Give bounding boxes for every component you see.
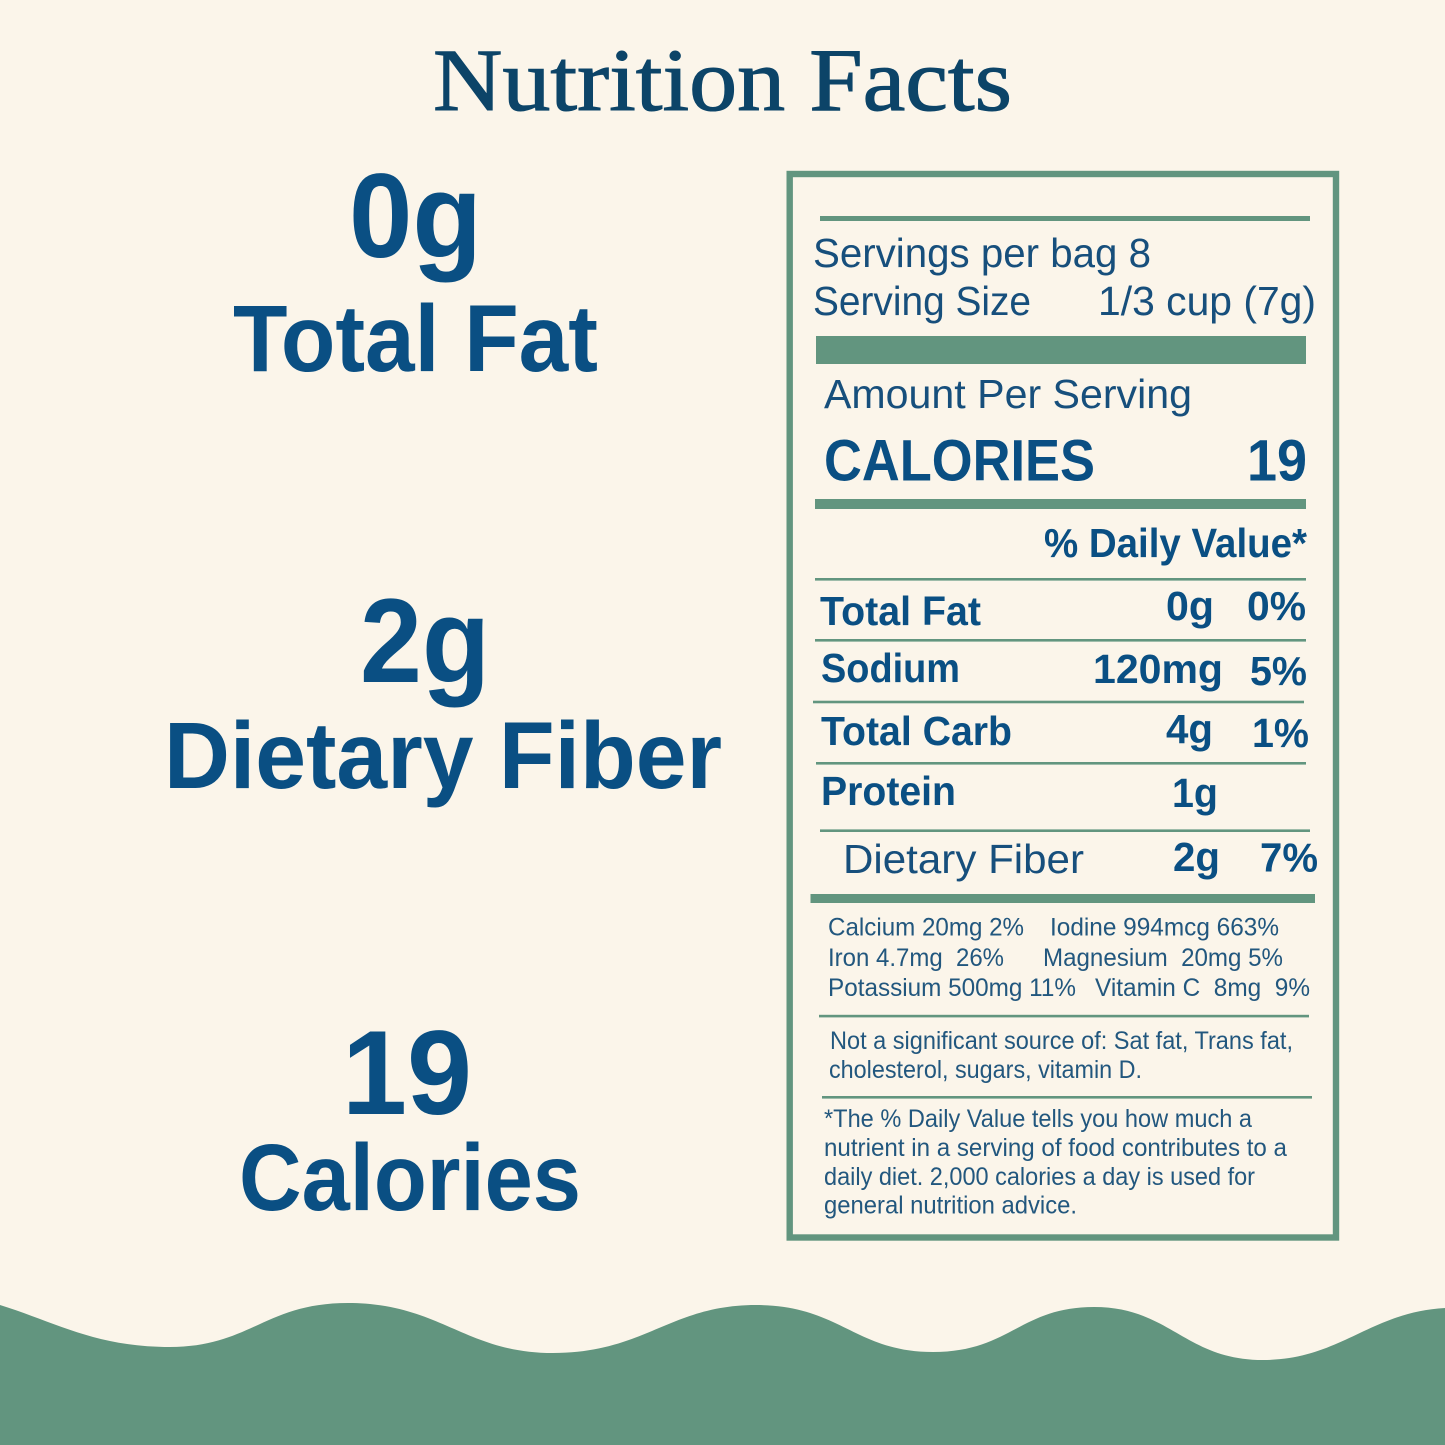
row: total carb: Total Carb (821, 708, 1012, 754)
servings: 1/3 cup (7g) (1098, 278, 1316, 324)
stat: calories (239, 1006, 581, 1231)
minerals list: Iodine 994mcg 663% (1050, 914, 1279, 942)
daily value footnote: general nutrition advice. (824, 1192, 1077, 1220)
calories row: 19 (1247, 428, 1307, 494)
green wave footer (0, 1303, 1445, 1445)
not a significant source note (829, 1027, 1293, 1084)
minerals list: Vitamin C 8mg 9% (1095, 974, 1310, 1002)
row: total carb (821, 706, 1309, 756)
stat: dietary fiber: Dietary Fiber (164, 703, 722, 809)
row: dietary fiber (843, 834, 1318, 882)
daily value heading: % Daily Value* (1044, 520, 1307, 566)
not a significant source note: cholesterol, sugars, vitamin D. (829, 1056, 1142, 1084)
row: sodium: 120mg (1093, 646, 1223, 692)
row: dietary fiber: 2g (1173, 834, 1220, 880)
minerals list: Calcium 20mg 2% (828, 914, 1024, 942)
calories row: CALORIES (824, 428, 1095, 494)
row: total fat: 0g (1166, 583, 1214, 629)
row: total fat: Total Fat (820, 588, 981, 634)
row: sodium: 5% (1250, 648, 1307, 694)
row: sodium: Sodium (821, 645, 960, 691)
daily value footnote: nutrient in a serving of food contributes to a (824, 1134, 1287, 1162)
not a significant source note: Not a significant source of: Sat fat, Trans fat, (830, 1027, 1293, 1055)
row: total carb: 1% (1252, 710, 1309, 756)
row: dietary fiber: 7% (1260, 834, 1318, 880)
servings: Servings per bag 8 (813, 230, 1151, 276)
servings: Serving Size (813, 278, 1031, 324)
row: total fat: 0% (1247, 583, 1306, 629)
row: total fat (820, 583, 1306, 634)
row: protein: Protein (821, 768, 956, 814)
stat: total fat (233, 149, 598, 392)
stat: calories: Calories (239, 1125, 581, 1231)
row: protein (821, 768, 1218, 816)
stat: total fat: Total Fat (233, 286, 598, 392)
minerals list: Potassium 500mg 11% (828, 974, 1076, 1002)
minerals list (828, 914, 1310, 1002)
amount per serving: Amount Per Serving (824, 371, 1192, 417)
minerals list: Iron 4.7mg 26% (828, 944, 1004, 972)
row: total carb: 4g (1166, 706, 1213, 752)
calories row (824, 428, 1307, 494)
daily value footnote: daily diet. 2,000 calories a day is used for (824, 1163, 1255, 1191)
title: Nutrition Facts (433, 32, 1012, 130)
row: dietary fiber: Dietary Fiber (843, 836, 1084, 882)
stat: dietary fiber: 2g (360, 574, 490, 708)
stat: total fat: 0g (349, 149, 482, 283)
panel: nutrition label (790, 174, 1336, 1238)
row: protein: 1g (1172, 770, 1218, 816)
stat: dietary fiber (164, 574, 722, 809)
row: sodium (821, 645, 1307, 694)
minerals list: Magnesium 20mg 5% (1043, 944, 1283, 972)
servings (813, 230, 1316, 324)
daily value footnote: *The % Daily Value tells you how much a (824, 1105, 1252, 1133)
stat: calories: 19 (342, 1006, 472, 1140)
daily value footnote (824, 1105, 1287, 1220)
